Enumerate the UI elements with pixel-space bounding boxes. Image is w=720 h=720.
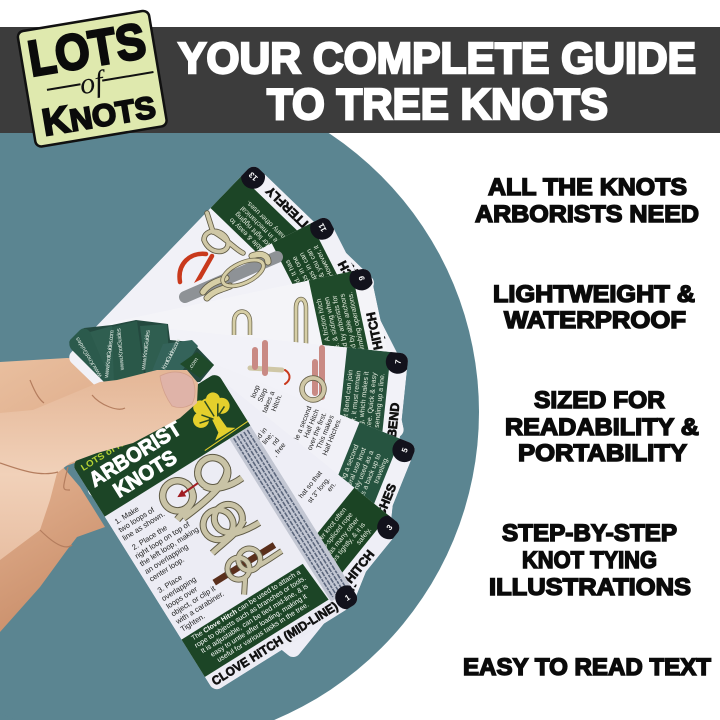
steps text: with a carabiner.	[173, 589, 226, 626]
card tails with website text: .com	[188, 357, 200, 371]
description band: The Clove Hitch can be used to attach a	[190, 569, 302, 642]
card 9: used by able anchors	[339, 292, 360, 359]
card 3: ind in	[253, 427, 269, 444]
feature list: PORTABILITY	[518, 440, 687, 467]
card 5: loop	[250, 384, 262, 399]
illustration: carabiner with knot	[185, 254, 277, 298]
steps text: center loop.	[148, 555, 186, 584]
feature list: LIGHTWEIGHT &	[493, 281, 695, 308]
illustration: overlapping loops	[200, 500, 262, 556]
steps text: overlapping	[160, 575, 198, 603]
card 11: more wraps in can	[299, 251, 331, 305]
feature list: ARBORISTS NEED	[475, 201, 699, 228]
steps text: the left loop, making	[138, 525, 200, 568]
card 7: 7	[394, 359, 403, 365]
illustration: two loops	[156, 448, 244, 522]
feature list: ALL THE KNOTS	[488, 174, 687, 201]
card 13	[69, 166, 374, 384]
card 11: loop of cord. It has	[284, 258, 317, 313]
steps text: 3. Place	[156, 573, 184, 595]
warning text strip	[229, 426, 352, 602]
card 7: However, it must remain	[348, 370, 363, 446]
card 3: A stopper knot often	[304, 506, 348, 559]
steps text	[114, 506, 224, 631]
card 3: hat so that	[298, 470, 324, 500]
card 5: Step	[257, 387, 269, 403]
card 7	[294, 342, 408, 518]
card 3: safely.	[355, 527, 373, 546]
card base	[74, 437, 358, 690]
steps text: 2. Place the	[130, 523, 169, 552]
card 7: SHEET BEND	[380, 402, 402, 484]
card 5: Tie a second	[292, 405, 314, 445]
hand behind cards	[0, 358, 140, 632]
steps text: right loop on top of	[133, 519, 192, 561]
steps text: line as shown.	[121, 509, 166, 543]
background circle	[0, 78, 479, 720]
card 5: Half Hitch	[303, 408, 321, 439]
description band: It is adjustable, can be tied mid-line, & is	[200, 583, 310, 655]
card 13: ALPINE BUTTERFLY	[263, 183, 361, 279]
card 11: line & you can	[306, 247, 332, 290]
thumb nail	[160, 372, 195, 408]
knot name strip: CLOVE HITCH (MID-LINE)	[209, 599, 340, 688]
arrow: red	[177, 482, 198, 498]
illustration: sheet bend	[250, 343, 324, 400]
card 11: However, it	[313, 244, 335, 278]
card 7: in a tree. Quick & easy	[364, 372, 379, 443]
card 5: TWO HALF HITCHES	[340, 482, 399, 602]
card 9: is favored by arborists for	[331, 294, 355, 373]
card 9: 9	[357, 275, 367, 281]
card 3: st 3" long.	[307, 476, 332, 505]
card 3: MUNTER HITCH	[307, 547, 377, 630]
feature list: ILLUSTRATIONS	[489, 574, 691, 601]
description band: rope to objects such as branches or tools.	[194, 575, 307, 650]
card 5: Half Hitches.	[322, 417, 343, 457]
brand line: LOTS of KNOTS	[79, 425, 148, 473]
card title: KNOTS	[109, 446, 181, 502]
feature list: WATERPROOF	[504, 307, 686, 334]
card 3: cinches tightly, & it is	[321, 521, 367, 576]
card 3	[88, 428, 400, 657]
front card: Arborist Knots	[71, 371, 364, 694]
steps text: an overlapping	[143, 542, 190, 576]
logo: Lots of Knots	[17, 10, 167, 147]
card 5: commonly used as a	[345, 450, 375, 512]
description band: easy to untie after loading, making it	[210, 593, 308, 659]
card 7: for sending up a line.	[373, 373, 387, 438]
card 3: on two-spliced rope	[311, 512, 355, 563]
card tails with website text: www.KnotGuides.com	[104, 330, 116, 379]
card 13: as well as use in mechanical	[239, 204, 308, 271]
card 3: line;	[262, 432, 275, 446]
logo: Lots of Knots: KNOTS	[39, 85, 158, 145]
steps text: two loops of	[117, 505, 157, 534]
card 13: A strong mid-line loop, stable & easy to	[228, 216, 320, 305]
feature list: EASY TO READ TEXT	[463, 654, 711, 681]
title: TO TREE KNOTS	[267, 80, 608, 129]
card 7: The Sheet Bend can join	[340, 369, 355, 447]
card 5	[250, 386, 415, 595]
card 5: over the first.	[307, 411, 328, 452]
card 5: traveling.	[373, 456, 390, 485]
card 3: 3	[385, 523, 395, 532]
feature list: STEP-BY-STEP	[502, 520, 677, 547]
icon: tree	[193, 392, 248, 451]
card 3: en.	[326, 481, 338, 493]
card 5: Hitch.	[271, 393, 284, 413]
card 13: tie & untie. Good for light rigging	[234, 210, 311, 285]
card 11: 11	[316, 221, 329, 233]
knuckle creases	[0, 380, 125, 547]
card 5: Tying a second	[336, 444, 361, 490]
card 9: adjustable climbing operations.	[347, 291, 374, 387]
card 5: 5	[400, 446, 410, 454]
thumb and palm	[0, 370, 198, 560]
logo: Lots of Knots: of	[77, 64, 109, 101]
number tab: 1	[343, 593, 352, 603]
number tab	[335, 585, 358, 610]
card 7: during, which makes it	[356, 371, 371, 441]
logo: Lots of Knots: LOTS	[24, 12, 150, 87]
description band	[181, 562, 329, 677]
steps text: Tighten.	[179, 612, 207, 634]
steps text: loops over	[164, 584, 199, 611]
card 3: , free	[272, 442, 288, 459]
feature list: KNOT TYING	[522, 547, 657, 574]
card 13: advantage & many other uses.	[245, 199, 318, 270]
steps text: object, or clip it	[169, 583, 218, 618]
card 9: a rope. & sliding when	[324, 296, 345, 365]
card 5: as a back up to	[359, 453, 383, 499]
card 5: This makes	[316, 414, 336, 450]
card 9: DISTEL HITCH	[364, 311, 395, 398]
card 9: A friction hitch	[316, 298, 332, 342]
card tails with website text: www.KnotGuides	[141, 330, 152, 371]
illustration: friction hitch loops	[234, 299, 306, 345]
feature list	[463, 174, 711, 681]
card tails with website text: www.KnotGuides	[75, 336, 104, 379]
feature list: READABILITY &	[505, 414, 699, 441]
card 5: takes a	[262, 390, 277, 414]
card title: ARBORIST	[85, 417, 186, 492]
card 11: PRUSIK HITCH	[335, 258, 388, 344]
card tails with website text	[69, 320, 214, 388]
card tails with website text: www.KnotGuides	[116, 328, 126, 371]
title	[178, 34, 696, 129]
card 3: nd	[271, 437, 281, 447]
illustration: butterfly knot	[180, 213, 243, 284]
steps text: 1. Make	[113, 504, 141, 526]
title: YOUR COMPLETE GUIDE	[178, 34, 696, 83]
header band	[0, 27, 720, 133]
card tails with website text: KnotGuides.com	[161, 338, 182, 371]
card 13: 13	[247, 170, 260, 183]
card 5: general use knot	[342, 447, 368, 497]
card header band	[71, 372, 250, 517]
card 9	[292, 269, 404, 436]
description band: useful for various tasks in the tree.	[216, 602, 310, 664]
feature list: SIZED FOR	[534, 387, 665, 414]
card 11: the wraps in one	[291, 255, 321, 304]
card 3: as many other	[327, 516, 361, 556]
illustration: knot on stick	[212, 542, 284, 595]
card 11	[194, 218, 397, 353]
